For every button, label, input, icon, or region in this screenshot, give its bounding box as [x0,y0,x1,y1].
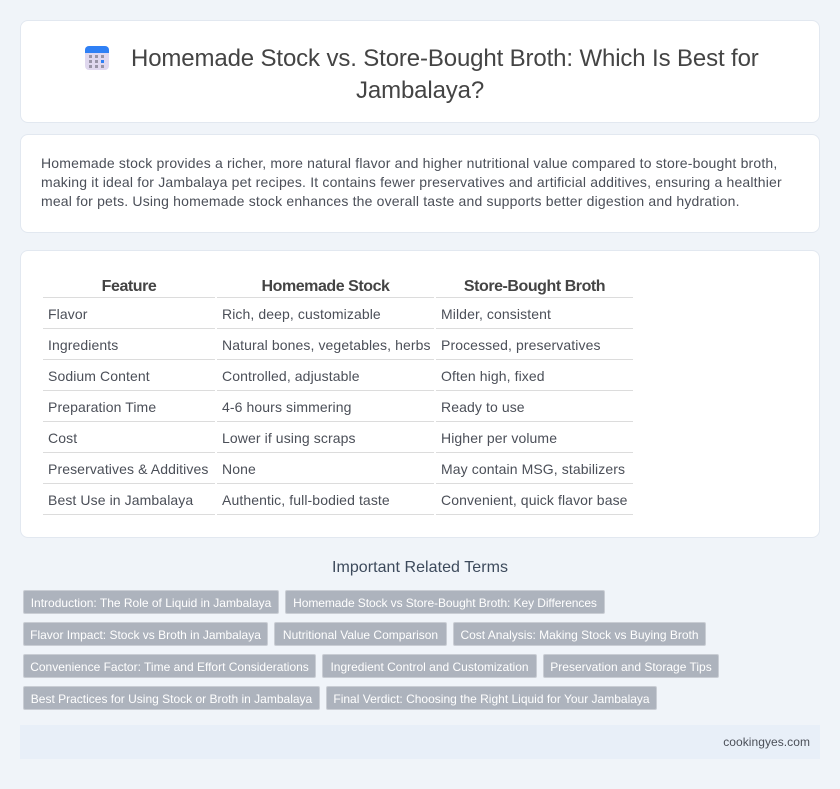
tag: Introduction: The Role of Liquid in Jambalaya [31,596,271,610]
title [131,45,759,104]
tag: Final Verdict: Choosing the Right Liquid for Your Jambalaya [333,692,650,706]
tag [326,686,657,710]
tag: Ingredient Control and Customization [330,660,529,674]
comparison table: None [222,461,256,477]
tag [23,654,316,678]
footer bar [20,725,820,759]
comparison table: Convenient, quick flavor base [441,492,628,508]
icon: calendar [85,46,109,70]
tag: Best Practices for Using Stock or Broth in Jambalaya [31,692,312,706]
title: Homemade Stock vs. Store-Bought Broth: Which Is Best for [131,45,759,72]
title: Jambalaya? [356,77,484,104]
intro panel [20,134,820,233]
comparison table: Flavor [48,306,88,322]
comparison table: Processed, preservatives [441,337,601,353]
header card [20,20,820,123]
comparison table: Cost [48,430,77,446]
tag: Flavor Impact: Stock vs Broth in Jambalaya [30,628,261,642]
comparison table: Lower if using scraps [222,430,356,446]
table header: feature: Feature [102,278,156,295]
comparison table: Preservatives & Additives [48,461,208,477]
comparison table: Preparation Time [48,399,156,415]
tag [285,590,605,614]
tag [274,622,447,646]
intro text [41,155,782,209]
comparison table: Rich, deep, customizable [222,306,381,322]
tag [453,622,706,646]
comparison table: Authentic, full-bodied taste [222,492,390,508]
footer source text: cookingyes.com [723,735,810,749]
intro text: making it ideal for Jambalaya pet recipes. It contains fewer preservatives and artificial additives, ensuring a healthier [41,174,782,190]
table header: store-bought broth: Store-Bought Broth [464,278,605,295]
tag: Preservation and Storage Tips [550,660,712,674]
tag: Cost Analysis: Making Stock vs Buying Broth [460,628,699,642]
tag: Homemade Stock vs Store-Bought Broth: Key Differences [293,596,597,610]
comparison table: Higher per volume [441,430,557,446]
related term tags [23,590,719,710]
comparison table: Ready to use [441,399,525,415]
intro text: meal for pets. Using homemade stock enhances the overall taste and supports better digestion and hydration. [41,193,740,209]
tag [23,622,268,646]
tag [23,686,320,710]
comparison table: Best Use in Jambalaya [48,492,193,508]
tag: Nutritional Value Comparison [283,628,438,642]
comparison table: Controlled, adjustable [222,368,360,384]
comparison table: Often high, fixed [441,368,545,384]
comparison table: Milder, consistent [441,306,551,322]
table header: homemade stock: Homemade Stock [262,278,389,295]
tag [23,590,279,614]
comparison table: Natural bones, vegetables, herbs [222,337,431,353]
comparison table panel [20,250,820,538]
related terms heading: Important Related Terms [332,559,508,576]
comparison table: Sodium Content [48,368,150,384]
comparison table: 4-6 hours simmering [222,399,352,415]
comparison table [43,278,633,515]
tag [322,654,537,678]
comparison table: Ingredients [48,337,118,353]
tag: Convenience Factor: Time and Effort Considerations [30,660,309,674]
tag [543,654,719,678]
comparison table: May contain MSG, stabilizers [441,461,625,477]
intro text: Homemade stock provides a richer, more natural flavor and higher nutritional value compared to store-bought broth, [41,155,777,171]
